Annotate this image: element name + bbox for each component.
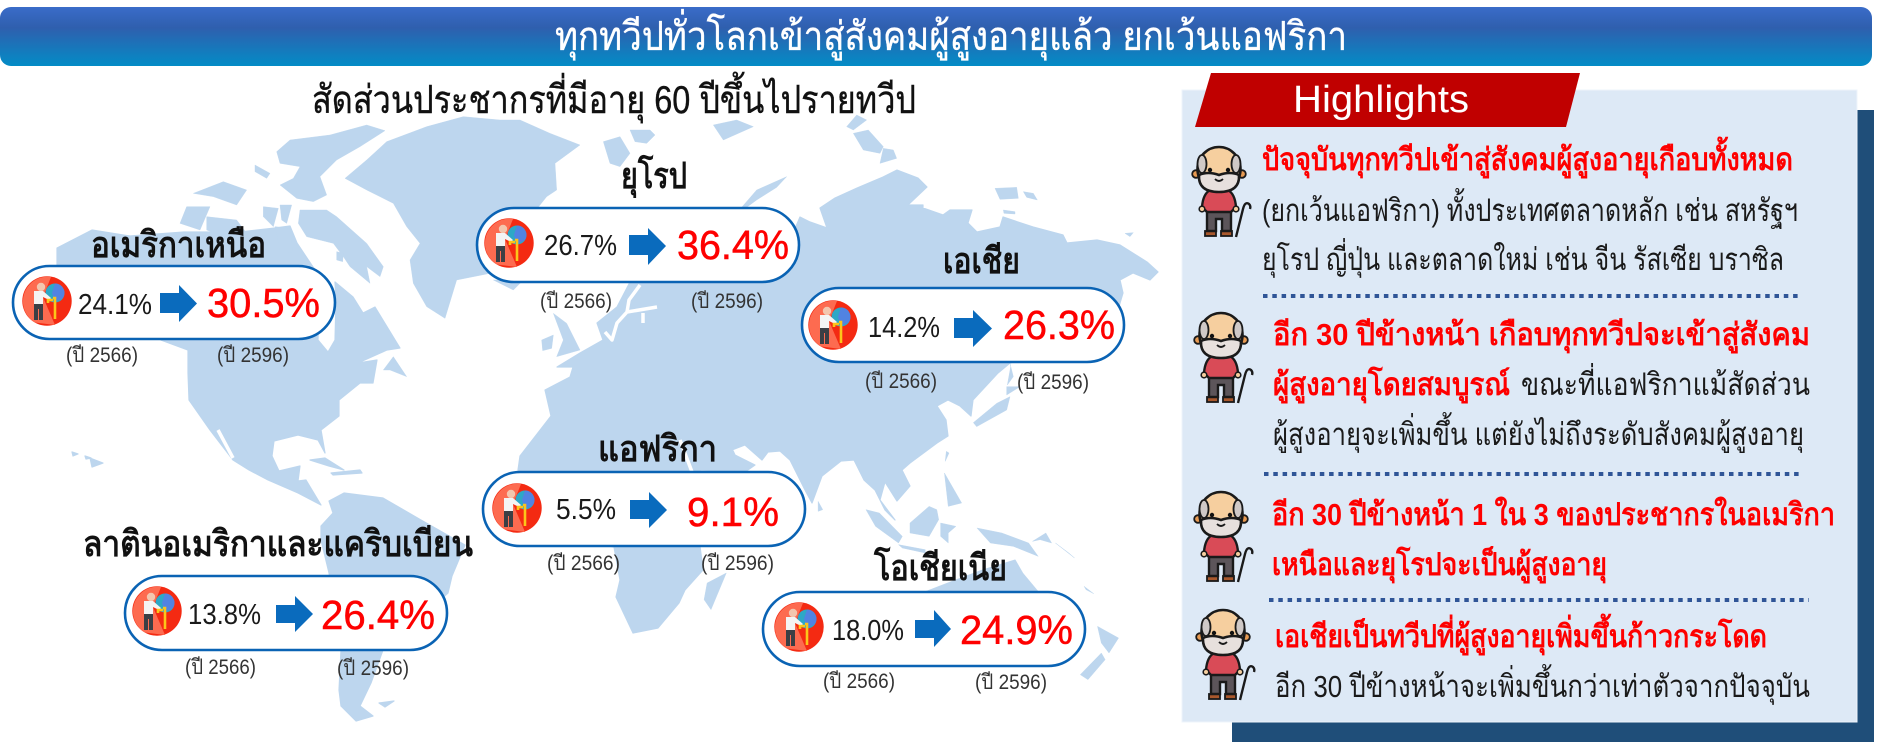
region: Asia <box>802 240 1124 394</box>
value 2566: 18.0% <box>832 615 904 647</box>
highlights heading: Highlights <box>1293 79 1469 121</box>
value 2596: 26.4% <box>321 592 435 638</box>
year label 2566: (ปี 2566) <box>865 370 937 393</box>
icon: elder with globe <box>484 218 534 268</box>
map: Caribbean and Hawaii <box>72 452 362 475</box>
map: Canadian Arctic islands and Greenland <box>180 117 580 377</box>
map: Britain and Ireland, Iceland, Svalbard, Arctic Russia <box>493 120 787 357</box>
title banner <box>0 7 1872 66</box>
map: Southeast Asia, Australia and New Zealand <box>704 451 1119 680</box>
value 2596: 9.1% <box>687 489 779 535</box>
icon: old man <box>1194 492 1252 582</box>
value 2566: 24.1% <box>78 289 152 321</box>
text: highlight 1 lead: ปัจจุบันทุกทวีปเข้าสู่สังคมผู้สูงอายุเกือบทั้งหมด <box>1262 136 1793 179</box>
icon: elder with globe <box>22 276 72 326</box>
panel background <box>1182 90 1857 722</box>
pill: Oceania <box>763 592 1085 666</box>
icon: elder with globe <box>492 483 542 533</box>
year label 2566: (ปี 2566) <box>66 344 138 367</box>
region: Oceania <box>763 546 1085 694</box>
year label 2596: (ปี 2596) <box>691 290 763 313</box>
icon: old man <box>1192 147 1250 237</box>
text: highlight 2 lead: อีก 30 ปีข้างหน้า เกือบทุกทวีปจะเข้าสู่สังคม <box>1273 317 1810 354</box>
highlights tab <box>1195 73 1580 127</box>
region: Europe <box>477 154 799 313</box>
year label 2566: (ปี 2566) <box>540 290 612 313</box>
region: Latin America and Caribbean <box>83 523 473 680</box>
map: North America <box>57 226 400 505</box>
heading: Oceania: โอเชียเนีย <box>873 546 1007 588</box>
text: highlight 3 line 2: เหนือและยุโรปจะเป็นผู้สูงอายุ <box>1272 545 1607 584</box>
icon: old man <box>1194 313 1252 403</box>
icon: elder with globe <box>808 300 858 350</box>
text: highlight 2 lead continued: ผู้สูงอายุโดยสมบูรณ์ <box>1273 366 1510 404</box>
pill: Africa <box>483 472 805 546</box>
text: highlight 2 line 2: ขณะที่แอฟริกาแม้สัดส่วน <box>1521 363 1810 402</box>
value 2566: 5.5% <box>556 494 616 526</box>
value 2596: 24.9% <box>960 607 1073 653</box>
arrow <box>954 310 992 347</box>
value 2566: 26.7% <box>544 230 617 262</box>
year label 2566: (ปี 2566) <box>185 656 256 679</box>
title banner: ทุกทวีปทั่วโลกเข้าสู่สังคมผู้สูงอายุแล้ว ยกเว้นแอฟริกา <box>555 9 1347 61</box>
value 2596: 26.3% <box>1003 302 1115 348</box>
map: Siberian islands and Japan <box>847 115 1133 427</box>
year label 2596: (ปี 2596) <box>701 552 774 575</box>
value 2566: 13.8% <box>188 599 261 631</box>
region: Africa <box>483 428 805 575</box>
heading: Latin America and Caribbean: ลาตินอเมริกาและแคริบเบียน <box>83 523 473 564</box>
map: South America <box>321 493 465 721</box>
value 2596: 36.4% <box>677 222 789 268</box>
highlight 3 <box>1194 492 1835 584</box>
pill: Latin America <box>125 576 447 650</box>
year label 2596: (ปี 2596) <box>217 344 289 367</box>
value 2596: 30.5% <box>207 280 320 326</box>
map: Baltic, Baja and Red Sea gaps <box>218 285 692 472</box>
pill: Asia <box>802 288 1124 362</box>
year label 2596: (ปี 2596) <box>975 671 1047 694</box>
arrow <box>629 228 666 265</box>
pill: Europe <box>477 208 799 282</box>
value 2566: 14.2% <box>868 312 940 344</box>
region: North America <box>13 224 335 367</box>
arrow <box>160 285 197 322</box>
panel: highlights <box>1182 73 1874 742</box>
arrow <box>630 492 667 528</box>
heading: Africa: แอฟริกา <box>598 428 717 469</box>
highlight 4 <box>1196 610 1810 706</box>
arrow <box>276 596 313 632</box>
heading: North America: อเมริกาเหนือ <box>91 224 266 265</box>
year label 2596: (ปี 2596) <box>1017 371 1089 394</box>
arrow <box>915 610 951 647</box>
map heading: สัดส่วนประชากรที่มีอายุ 60 ปีขึ้นไปรายทวีป <box>312 71 916 124</box>
world map <box>57 115 1158 721</box>
highlight 2 <box>1194 313 1810 454</box>
highlight 1 <box>1192 136 1798 279</box>
icon: old man <box>1196 610 1254 700</box>
text: highlight 4 lead: เอเชียเป็นทวีปที่ผู้สูงอายุเพิ่มขึ้นก้าวกระโดด <box>1275 613 1767 656</box>
heading: Europe: ยุโรป <box>621 154 687 199</box>
year label 2566: (ปี 2566) <box>547 552 620 575</box>
icon: elder with globe <box>132 586 182 636</box>
heading: Asia: เอเชีย <box>943 240 1020 281</box>
icon: elder with globe <box>774 602 824 652</box>
map: Europe, Asia and Africa <box>518 170 1158 633</box>
panel shadow <box>1232 110 1874 742</box>
pill: North America <box>13 266 335 339</box>
year label 2566: (ปี 2566) <box>823 670 895 693</box>
year label 2596: (ปี 2596) <box>337 657 409 680</box>
